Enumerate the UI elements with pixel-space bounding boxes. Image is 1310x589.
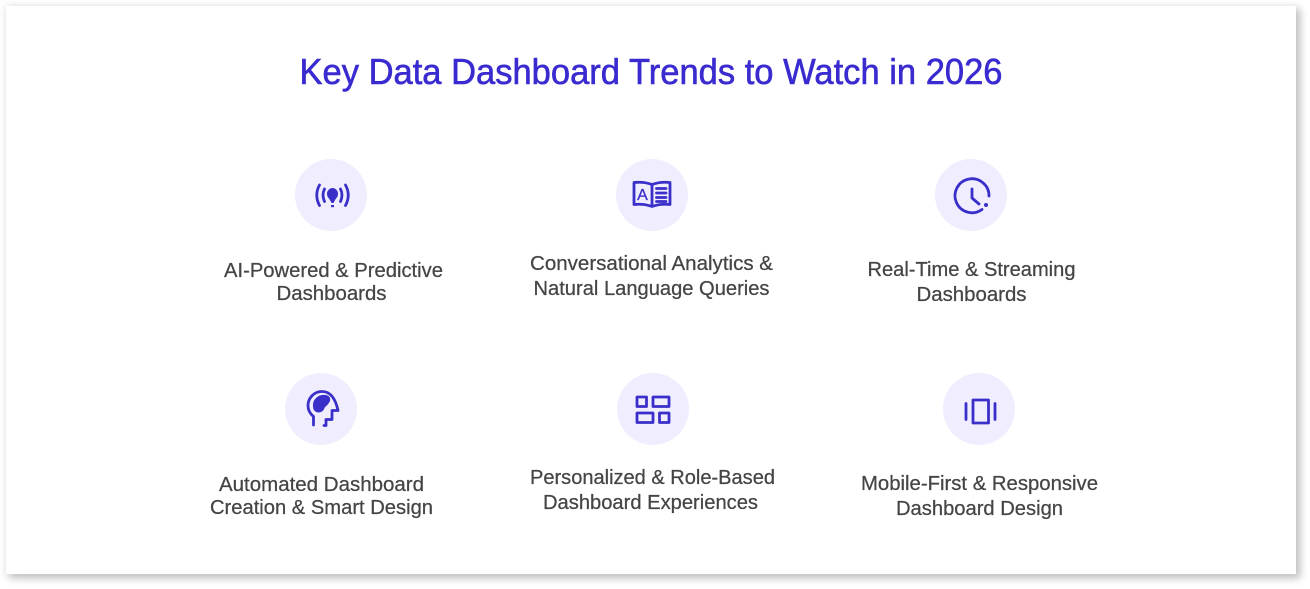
trend: real-time xyxy=(868,159,1076,306)
label: Conversational Analytics & xyxy=(530,253,774,275)
label: AI-Powered & Predictive xyxy=(224,260,443,282)
trend: automated xyxy=(210,373,433,519)
label: Real-Time & Streaming xyxy=(868,259,1076,281)
icon: mobile device xyxy=(943,373,1015,445)
label: Creation & Smart Design xyxy=(210,497,433,519)
icon: open book xyxy=(616,159,688,231)
icon: layout grid xyxy=(617,373,689,445)
label: Dashboard Experiences xyxy=(543,492,758,514)
trend: AI-powered xyxy=(224,159,443,305)
label: Dashboard Design xyxy=(896,498,1063,520)
trend: personalized xyxy=(530,373,775,514)
icon: open book: A xyxy=(637,187,648,204)
icon: head with brain xyxy=(285,373,357,445)
icon: bulb with signal waves xyxy=(295,159,367,231)
trend: conversational xyxy=(530,159,774,300)
label: Personalized & Role-Based xyxy=(530,467,775,489)
icon: clock xyxy=(935,159,1007,231)
label: Automated Dashboard xyxy=(219,474,424,496)
label: Dashboards xyxy=(916,284,1026,306)
title: Key Data Dashboard Trends to Watch in 2026 xyxy=(300,51,1002,92)
label: Dashboards xyxy=(276,283,386,305)
trend: mobile-first xyxy=(861,373,1098,520)
label: Mobile-First & Responsive xyxy=(861,473,1098,495)
label: Natural Language Queries xyxy=(534,278,770,300)
